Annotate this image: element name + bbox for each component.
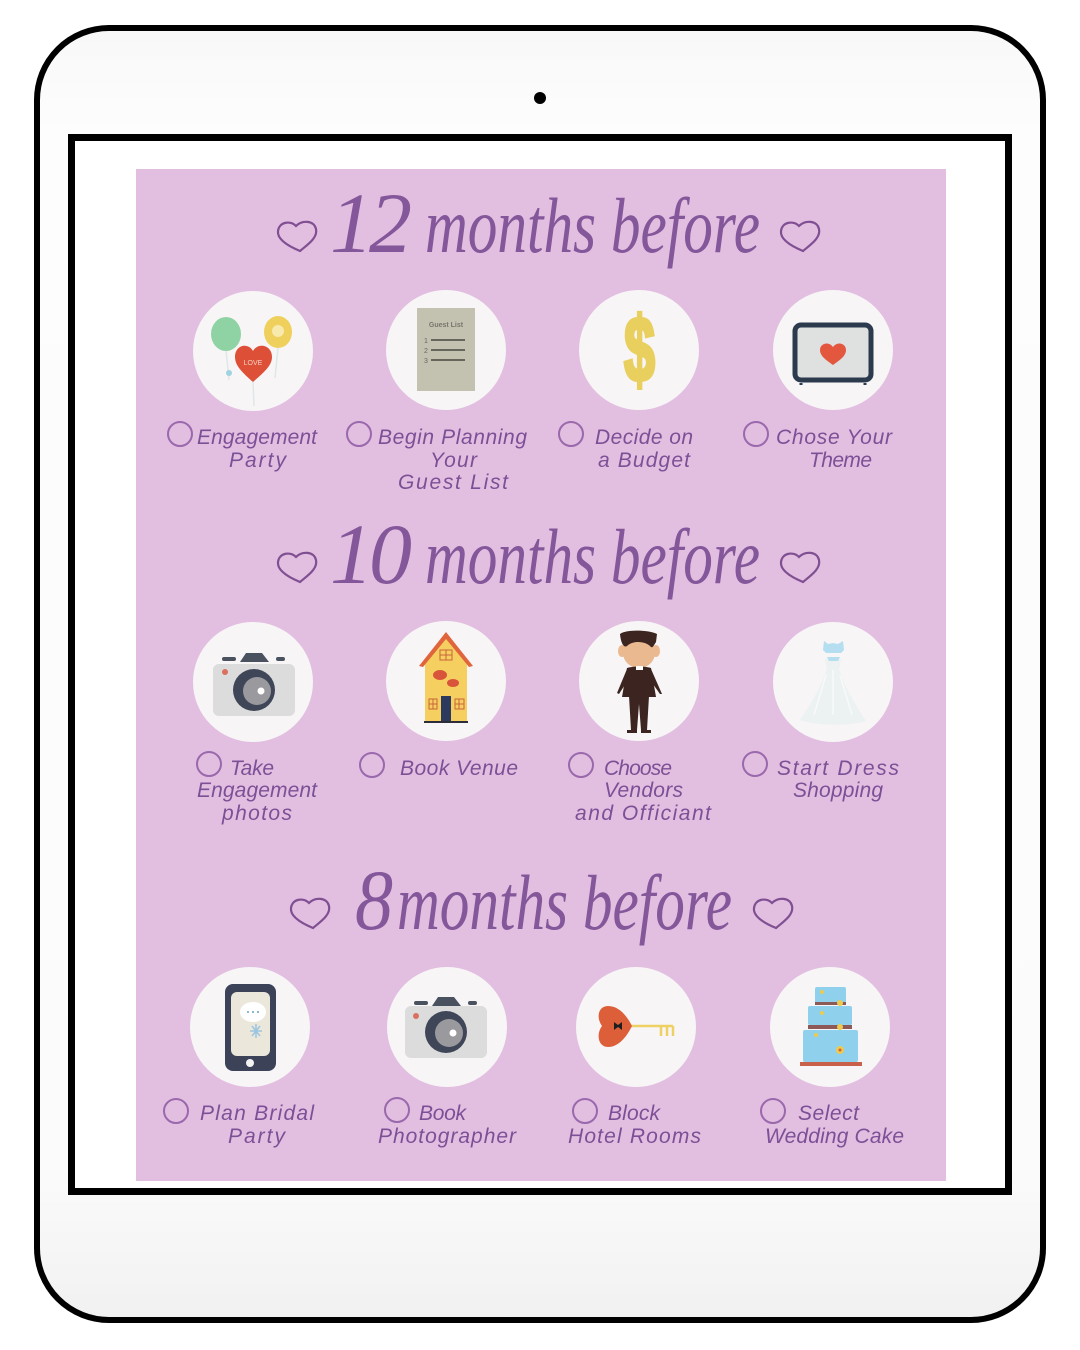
- label: Engagement: [197, 779, 318, 802]
- heading: 8 months before: months before: [397, 859, 732, 946]
- checkbox: [385, 1098, 409, 1122]
- icon: document: 3: [424, 358, 428, 365]
- heading: 10 months before: [278, 506, 819, 602]
- checkbox: [569, 753, 593, 777]
- label: Plan Bridal: [200, 1102, 315, 1125]
- label: Choose: [604, 757, 672, 780]
- heading: 12 months before: [278, 175, 819, 271]
- label: Party: [228, 1125, 286, 1148]
- heading: 8 months before: [291, 852, 792, 948]
- checkbox: [168, 422, 192, 446]
- icon: officiant: [617, 631, 662, 733]
- item: bridal party: [164, 967, 315, 1148]
- icon: document: 2: [424, 348, 428, 355]
- icon: house: [419, 632, 473, 723]
- heading: 8 months before: 8: [355, 852, 393, 948]
- item: engagement party: [168, 291, 318, 472]
- label: Take: [230, 757, 274, 780]
- label: [197, 426, 318, 472]
- checkbox: [559, 422, 583, 446]
- label: [595, 426, 693, 472]
- label: Chose Your: [776, 426, 893, 449]
- item: dress shopping: [743, 622, 900, 802]
- icon: camera: [405, 997, 487, 1058]
- item: venue: [360, 621, 518, 780]
- icon: wedding dress: [800, 641, 866, 725]
- icon: camera: [213, 653, 295, 716]
- icon: document: [417, 308, 475, 391]
- panel: checklist poster: [136, 169, 946, 1181]
- label: Block: [608, 1102, 662, 1125]
- heading: 12 months before: months before: [425, 182, 760, 269]
- icon: balloons: LOVE: [244, 360, 263, 367]
- label: [378, 1102, 517, 1148]
- label: Photographer: [378, 1125, 517, 1148]
- label: [776, 426, 893, 472]
- label: Select: [798, 1102, 860, 1125]
- label: Hotel Rooms: [568, 1125, 702, 1148]
- checkbox: [197, 752, 221, 776]
- label: Theme: [809, 449, 872, 472]
- icon: smartphone: [225, 984, 276, 1071]
- icon: document: Guest List: [429, 322, 464, 329]
- label: a Budget: [598, 449, 691, 472]
- camera dot: [534, 92, 546, 104]
- heading: 10 months before: months before: [425, 513, 760, 600]
- item: wedding cake: [761, 967, 904, 1148]
- label: Shopping: [793, 779, 883, 802]
- label: Wedding Cake: [765, 1125, 904, 1148]
- item: vendors and officiant: [569, 621, 712, 825]
- icon: document: 1: [424, 338, 428, 345]
- checkbox: [573, 1099, 597, 1123]
- label: Party: [229, 449, 288, 472]
- label: Your: [430, 449, 478, 472]
- icon: framed heart: [795, 325, 871, 385]
- checkbox: [743, 752, 767, 776]
- item: photographer: [378, 967, 517, 1148]
- label: Vendors: [604, 779, 684, 802]
- label: Decide on: [595, 426, 693, 449]
- label: [575, 757, 712, 825]
- item: hotel rooms: [568, 967, 702, 1148]
- label: Book Venue: [400, 757, 518, 780]
- tablet screen: [72, 138, 1008, 1192]
- heading: 12 months before: 12: [330, 175, 412, 271]
- item: guest list: [347, 290, 527, 494]
- label: and Officiant: [575, 802, 712, 825]
- item: engagement photos: [193, 622, 318, 825]
- label: Engagement: [197, 426, 318, 449]
- label: [568, 1102, 702, 1148]
- label: photos: [221, 802, 292, 825]
- checkbox: [164, 1099, 188, 1123]
- label: [777, 757, 900, 802]
- label: [200, 1102, 315, 1148]
- label: [197, 757, 318, 825]
- checkbox: [761, 1099, 785, 1123]
- icon: heart key: [599, 1006, 673, 1047]
- label: Book: [419, 1102, 468, 1125]
- label: [765, 1102, 904, 1148]
- label: [378, 426, 527, 494]
- checkbox: [347, 422, 371, 446]
- icon: tiered cake: [800, 987, 862, 1066]
- icon: balloons: [211, 316, 292, 406]
- item: budget: [559, 290, 699, 472]
- checkbox: [744, 422, 768, 446]
- checkbox: [360, 753, 384, 777]
- label: Guest List: [398, 471, 509, 494]
- item: theme: [744, 290, 893, 472]
- heading: 10 months before: 10: [330, 506, 412, 602]
- label: Start Dress: [777, 757, 900, 780]
- label: Begin Planning: [378, 426, 527, 449]
- icon: dollar sign: $: [624, 299, 655, 401]
